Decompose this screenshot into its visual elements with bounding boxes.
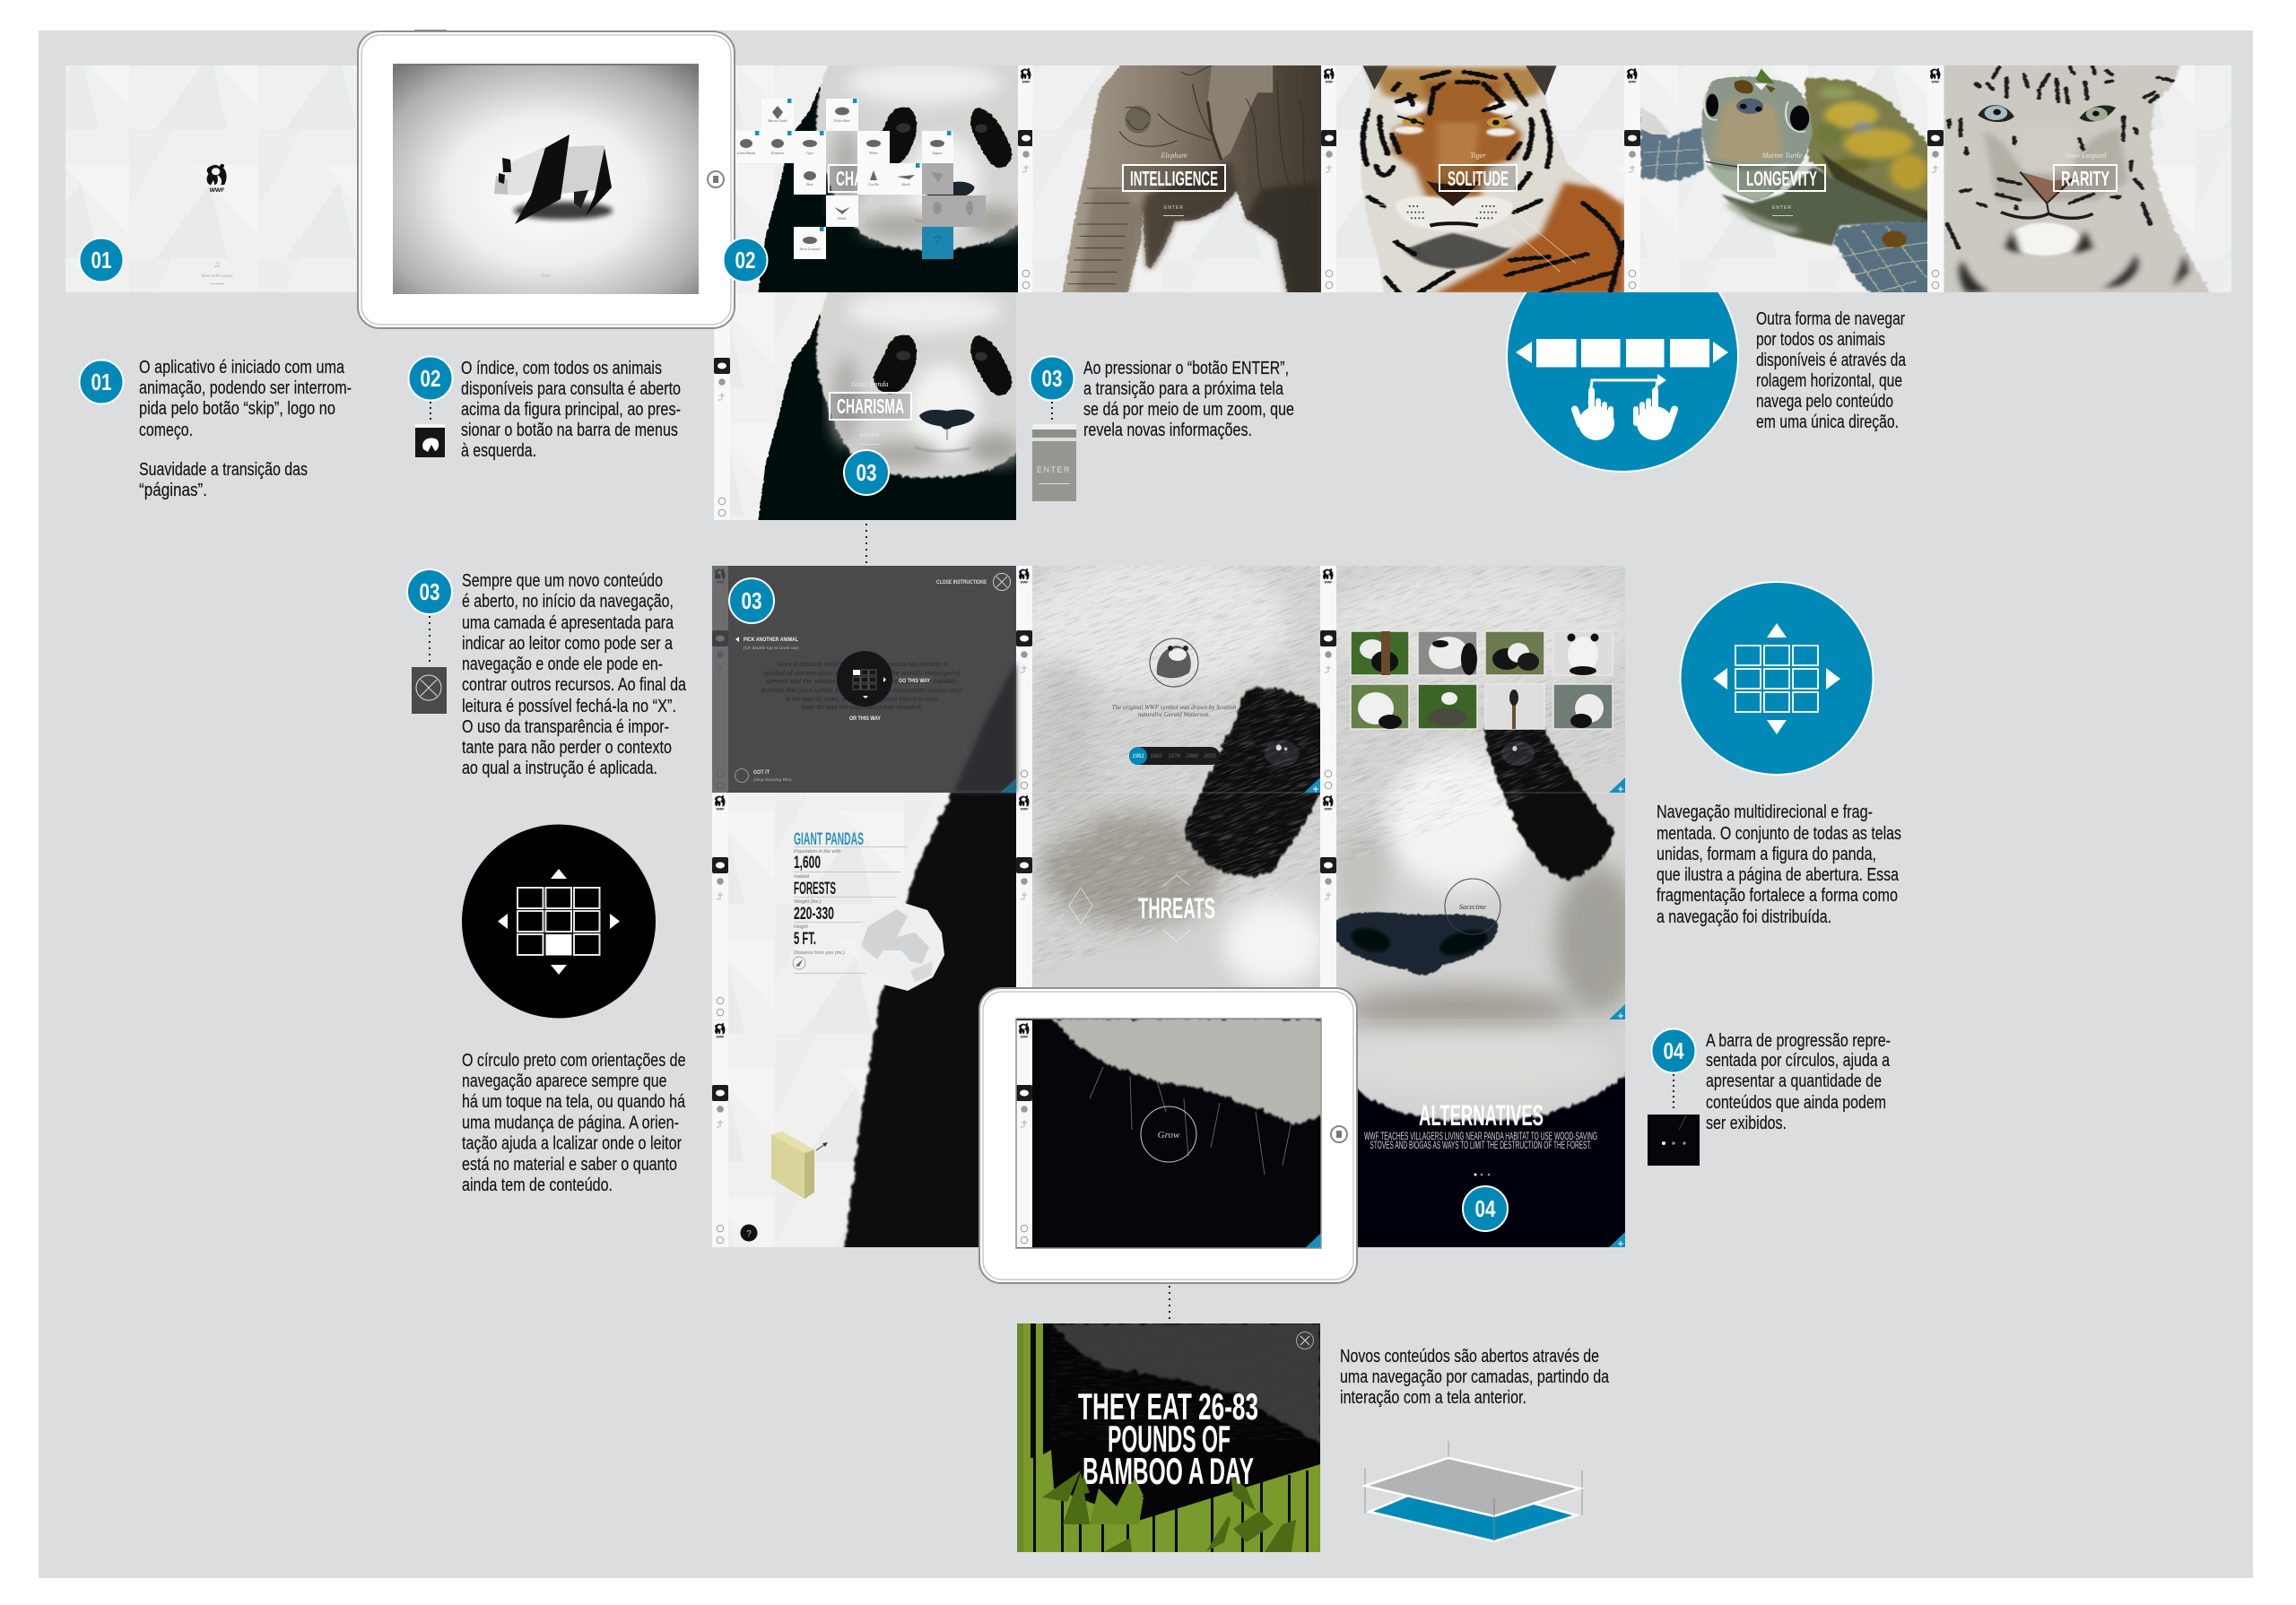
icon: menu animal button [415, 424, 445, 457]
panel: giant panda facts: Population in the wild [794, 849, 841, 855]
right eye patch [1483, 728, 1613, 880]
label LONGEVITY: LONGEVITY [1746, 167, 1817, 190]
poster headline: THEY EAT 26-83 [1078, 1385, 1258, 1427]
text: step 03 overlay: O uso da transparência é impor- [462, 717, 669, 737]
text: step 03 ENTER: Ao pressionar o “botão ENTER”, [1083, 359, 1289, 378]
text: step 01 [79, 358, 352, 500]
label CHARISMA: ENTER [860, 433, 880, 438]
text: multidirectional navigation: que ilustra a página de abertura. Essa [1657, 865, 1900, 885]
screen: grow [1016, 1019, 1326, 1248]
icon: progress dots crop [1648, 1115, 1700, 1166]
icon: home button [708, 171, 724, 187]
text: step 02: sionar o botão na barra de menus [461, 421, 678, 440]
panel: instructions overlay: PICK ANOTHER ANIMAL [744, 638, 798, 643]
panel: instructions overlay: But more than just a symbol, it is also a remarkable conservation success story. [761, 688, 963, 694]
icon: black navigation circle [462, 825, 656, 1019]
text: multidirectional navigation: fragmentação fortalece a forma como [1657, 886, 1898, 906]
animal index tiles: Shark [901, 182, 910, 187]
panel: giant panda facts: GIANT PANDAS [794, 830, 864, 849]
text: step 01: O aplicativo é iniciado com uma [139, 358, 345, 377]
illustration: yellow block [771, 1132, 828, 1199]
text: step 02: disponíveis para consulta é aberto [461, 379, 681, 399]
panel: WWF symbol timeline: 1962 [1150, 754, 1162, 759]
eyes [1265, 740, 1535, 767]
animal index tiles: ? [934, 233, 941, 248]
side menu [1321, 65, 1337, 292]
middle and right columns: panda face [833, 265, 1830, 1265]
animal index tiles: Rhino [868, 151, 878, 155]
sound hint: Best with sound [202, 273, 233, 279]
label SOLITUDE: SOLITUDE [1448, 167, 1509, 190]
icon: close button crop [412, 667, 447, 714]
text: multidirectional navigation: mentada. O conjunto de todas as telas [1657, 824, 1901, 844]
badge 03 [729, 578, 774, 623]
panel: instructions overlay: CLOSE INSTRUCTIONS [936, 580, 987, 586]
label LONGEVITY [1738, 152, 1825, 216]
text: horizontal navigation: Outra forma de navegar [1756, 309, 1905, 329]
side menu [1018, 65, 1034, 292]
text: step 03 overlay: leitura é possível fechá-la no “X”. [462, 697, 676, 716]
animal index tiles: Giant Panda [737, 151, 755, 155]
panel: WWF symbol timeline: 1961 [1132, 754, 1144, 759]
icon: horizontal swipe navigation circle [1507, 240, 1738, 472]
panel: instructions overlay: (Or double tap to zoom out) [744, 645, 799, 651]
panel: giant panda facts: 220-330 [794, 905, 834, 924]
icon: ENTER button crop: ENTER [1037, 465, 1071, 474]
text: step 01: “páginas”. [139, 481, 207, 500]
badge 04: 04 [1663, 1037, 1684, 1064]
step 01 badge on splash screen: 01 [91, 247, 111, 273]
text: black circle explanation: uma mudança de página. A orien- [462, 1114, 679, 1133]
side menu [1624, 65, 1640, 292]
text: step 03 overlay: contrar outros recursos. Ao final da [462, 675, 687, 695]
left column: black shoulder on light background [712, 789, 1022, 1251]
text: step 04 progress: A barra de progressão repre- [1706, 1031, 1891, 1051]
label SOLITUDE: Tiger [1471, 152, 1486, 160]
text: step 01: Suavidade a transição das [139, 460, 308, 480]
badge 04: 04 [1474, 1195, 1496, 1222]
label INTELLIGENCE [1123, 152, 1225, 216]
text: step 03 ENTER [1030, 357, 1294, 501]
screen: panda with animal index: ENTER [860, 205, 880, 211]
iPad frame with origami panda: Skip [541, 273, 550, 279]
bamboo leaves [1042, 1471, 1296, 1552]
label sacecime hotspot: Sacecime [1459, 903, 1487, 911]
label ALTERNATIVES: ALTERNATIVES [1419, 1099, 1544, 1132]
screen: snow leopard [1944, 65, 2231, 294]
label RARITY: Snow Leopard [2065, 152, 2107, 160]
left eye patch [1185, 688, 1323, 876]
screen: splash page [65, 65, 370, 292]
panel: giant panda facts: Distance from you (mi.) [794, 950, 845, 956]
side menu [714, 293, 730, 520]
animal index tiles: Jaguar [932, 151, 943, 155]
text: layered navigation [1340, 1347, 1610, 1408]
text: black circle explanation [462, 1051, 686, 1195]
step 03 badge on charisma screen: 03 [856, 459, 877, 486]
text: black circle explanation: navegação aparece sempre que [462, 1071, 667, 1091]
grow hotspot [1141, 1106, 1196, 1162]
panel: giant panda facts: 1,600 [794, 854, 821, 872]
grow hotspot: Grow [1158, 1130, 1180, 1141]
poster headline [1078, 1385, 1258, 1492]
animal index tiles: Whale [838, 216, 847, 221]
label LONGEVITY: ENTER [1772, 205, 1792, 211]
step 03 badge on charisma screen [844, 450, 889, 495]
badge 01 [79, 360, 124, 403]
animal index tiles: Tiger [806, 151, 814, 155]
panel: giant panda facts: 5 FT. [794, 930, 816, 949]
text: black circle explanation: tação ajuda a lcalizar onde o leitor [462, 1133, 682, 1153]
iPad frame with origami panda [358, 30, 735, 328]
text: step 03 overlay [407, 569, 687, 778]
text: horizontal navigation: em uma única direção. [1756, 412, 1899, 432]
panel: WWF symbol timeline: naturalist Gerald Watterson. [1138, 711, 1210, 718]
text: step 03 overlay: uma camada é apresentada para [462, 613, 674, 633]
screen: marine turtle [1640, 65, 1930, 294]
text: step 02: à esquerda. [461, 441, 536, 461]
text: multidirectional navigation: Navegação multidirecional e frag- [1657, 802, 1873, 822]
label CHARISMA: Giant Panda [851, 380, 889, 388]
panel: instructions overlay: In the past 20 years, reserves have grown from 0 to more [786, 697, 938, 703]
label INTELLIGENCE: INTELLIGENCE [1130, 167, 1218, 190]
text: step 03 overlay: é aberto, no início da navegação, [462, 592, 674, 612]
badge 03: 03 [1042, 365, 1062, 392]
poster headline: POUNDS OF [1108, 1418, 1231, 1460]
label ALTERNATIVES [1364, 1099, 1597, 1176]
nose [1335, 912, 1498, 975]
badge 04 [1652, 1029, 1695, 1072]
panel: instructions overlay: GOT IT [753, 770, 770, 776]
text: black circle explanation: está no material e saber o quanto [462, 1155, 677, 1175]
text: horizontal navigation: rolagem horizontal, que [1756, 371, 1902, 391]
panel: instructions overlay: (Stop showing this) [753, 776, 792, 783]
text: step 04 progress: sentada por círculos, ajuda a [1706, 1051, 1891, 1071]
blue corner tabs [1304, 777, 1625, 1247]
side menus [712, 566, 1336, 1247]
sound hint [202, 260, 233, 284]
large panda composite screens [712, 265, 1830, 1265]
panel: instructions overlay: GO THIS WAY [899, 679, 930, 684]
icon: WWF logo [207, 164, 227, 194]
text: horizontal navigation: navega pelo conteúdo [1756, 392, 1893, 412]
poster headline: BAMBOO A DAY [1083, 1450, 1254, 1492]
screen: tiger [1336, 65, 1625, 294]
text: horizontal navigation: por todos os animais [1756, 330, 1885, 350]
text: step 01: pida pelo botão “skip”, logo no [139, 399, 335, 419]
badge 03: 03 [741, 587, 762, 614]
text: step 03 overlay: Sempre que um novo conteúdo [462, 571, 663, 591]
text: step 02: O índice, com todos os animais [461, 359, 662, 378]
text: step 02: acima da figura principal, ao pres- [461, 400, 681, 420]
screen: charisma panda close-up [714, 290, 1022, 523]
label sacecime hotspot [1445, 879, 1500, 934]
badge 02 [409, 357, 452, 400]
screen: panda with animal index [735, 62, 1022, 295]
illustration: origami panda [494, 134, 613, 224]
text: black circle explanation: ainda tem de conteúdo. [462, 1176, 613, 1195]
label INTELLIGENCE: ENTER [1164, 205, 1184, 211]
text: black circle explanation: há um toque na tela, ou quando há [462, 1092, 686, 1112]
panel: giant panda facts: Height [794, 924, 808, 930]
iPad frame with grow screen [979, 988, 1357, 1283]
panel: WWF symbol timeline [1112, 638, 1237, 765]
panel: WWF symbol timeline: 2000 [1203, 754, 1216, 759]
panel: WWF symbol timeline: The original WWF symbol was drawn by Scottish [1112, 704, 1237, 711]
text: horizontal navigation [1756, 309, 1907, 432]
label INTELLIGENCE: Elephant [1161, 152, 1187, 160]
icon: blue multidirectional navigation circle [1681, 582, 1873, 775]
text: step 03 overlay: indicar ao leitor como pode ser a [462, 634, 674, 654]
text: step 04 progress: apresentar a quantidade de [1706, 1071, 1882, 1091]
text: step 04 progress: ser exibidos. [1706, 1114, 1787, 1133]
label RARITY [2054, 152, 2117, 191]
step 01 badge on splash screen [79, 239, 124, 282]
icon: close [1297, 1332, 1313, 1349]
text: step 03 overlay: ao qual a instrução é aplicada. [462, 759, 657, 778]
filmstrip: top row of app screens [65, 62, 2231, 295]
animal index tiles: Gorilla [868, 182, 879, 187]
screen: elephant [1032, 65, 1323, 294]
panel: giant panda facts: FORESTS [794, 880, 836, 898]
panel: giant panda facts [793, 830, 944, 991]
animal index tiles: Bear [806, 182, 813, 187]
icon: ENTER button crop [1032, 424, 1076, 501]
animal index tiles: Polar Bear [833, 118, 850, 123]
text: step 01: animação, podendo ser interrom- [139, 378, 352, 398]
badge 03 [1030, 357, 1074, 400]
animal index tiles [735, 99, 986, 259]
title box partly hidden by index: CHARISMA [836, 167, 903, 190]
text: step 03 ENTER: se dá por meio de um zoom, que [1083, 400, 1294, 420]
badge 04 [1463, 1186, 1508, 1231]
text: step 04 progress: conteúdos que ainda podem [1706, 1093, 1886, 1113]
label CHARISMA: CHARISMA [837, 395, 904, 418]
text: horizontal navigation: disponíveis é através da [1756, 351, 1907, 370]
panel: instructions overlay: than 60 and the population has doubled. [802, 705, 923, 711]
panel: giant panda facts: Habitat [794, 874, 810, 880]
help button [741, 1225, 757, 1241]
icon: home button [1331, 1126, 1347, 1142]
bottom black fur [1352, 1071, 1630, 1261]
text: layered navigation: Novos conteúdos são abertos através de [1340, 1347, 1599, 1366]
badge 03 [407, 569, 452, 614]
label LONGEVITY: Marine Turtle [1761, 152, 1803, 160]
label RARITY: RARITY [2061, 167, 2109, 190]
panel: instructions overlay: symbol of conservation worldwide, and of the world's endangered [763, 671, 961, 677]
help button: ? [746, 1229, 752, 1239]
step 02 badge on index screen: 02 [735, 247, 755, 273]
panel: WWF symbol timeline: 1986 [1186, 754, 1198, 759]
text: step 03 ENTER: revela novas informações. [1083, 421, 1252, 440]
text: multidirectional navigation: a navegação foi distribuída. [1657, 907, 1831, 927]
text: step 03 overlay: navegação e onde ele pode en- [462, 655, 663, 674]
text: step 02 [409, 357, 681, 461]
panel: giant panda facts: Weight (lbs.) [794, 899, 822, 905]
photo gallery [1351, 631, 1613, 729]
sound hint: ♫ [213, 260, 221, 270]
badge 03: 03 [420, 578, 439, 605]
text: layered navigation: interação com a tela anterior. [1340, 1388, 1526, 1408]
illustration: low-poly globe [856, 903, 944, 991]
text: multidirectional navigation: unidas, formam a figura do panda, [1657, 845, 1876, 864]
text: step 01: começo. [139, 421, 193, 440]
panel: instructions overlay: species and the solutions needed to save them and their habitats. [766, 679, 959, 685]
panel: instructions overlay [712, 566, 1016, 793]
text: multidirectional navigation [1657, 802, 1901, 927]
label THREATS [1069, 875, 1283, 941]
diagram: stacked layers [1365, 1441, 1582, 1541]
panel: instructions overlay: Since it became WWF's logo, the giant panda has become a [777, 662, 947, 668]
badge 02: 02 [420, 365, 441, 392]
label ALTERNATIVES: STOVES AND BIOGAS AS WAYS TO LIMIT THE DESTRUCTION OF THE FOREST. [1370, 1139, 1591, 1151]
label THREATS: THREATS [1138, 892, 1215, 924]
animal index tiles: Elephant [770, 151, 785, 155]
label CHARISMA [830, 380, 911, 445]
panel: bamboo poster [1017, 1323, 1320, 1552]
step 02 badge on index screen [723, 239, 768, 282]
bamboo stems [1033, 1453, 1309, 1552]
text: step 03 ENTER: a transição para a próxima tela [1083, 379, 1284, 399]
title box partly hidden by index [828, 164, 857, 193]
animal index tiles: Snow Leopard [799, 247, 822, 251]
label ALTERNATIVES: WWF TEACHES VILLAGERS LIVING NEAR PANDA HABITAT TO USE WOOD-SAVING [1364, 1130, 1597, 1142]
panel: WWF symbol timeline: 1978 [1168, 754, 1180, 759]
badge 01: 01 [91, 369, 111, 395]
panel: instructions overlay: OR THIS WAY [849, 716, 881, 722]
animal index tiles: Marine Turtle [767, 118, 787, 123]
side menu [1927, 65, 1944, 292]
label SOLITUDE [1439, 152, 1517, 191]
text: step 04 progress [1648, 1029, 1891, 1166]
text: black circle explanation: O círculo preto com orientações de [462, 1051, 685, 1071]
mini navigation circle [837, 651, 892, 707]
text: step 03 overlay: tante para não perder o contexto [462, 738, 672, 758]
text: layered navigation: uma navegação por camadas, partindo da [1340, 1367, 1610, 1387]
